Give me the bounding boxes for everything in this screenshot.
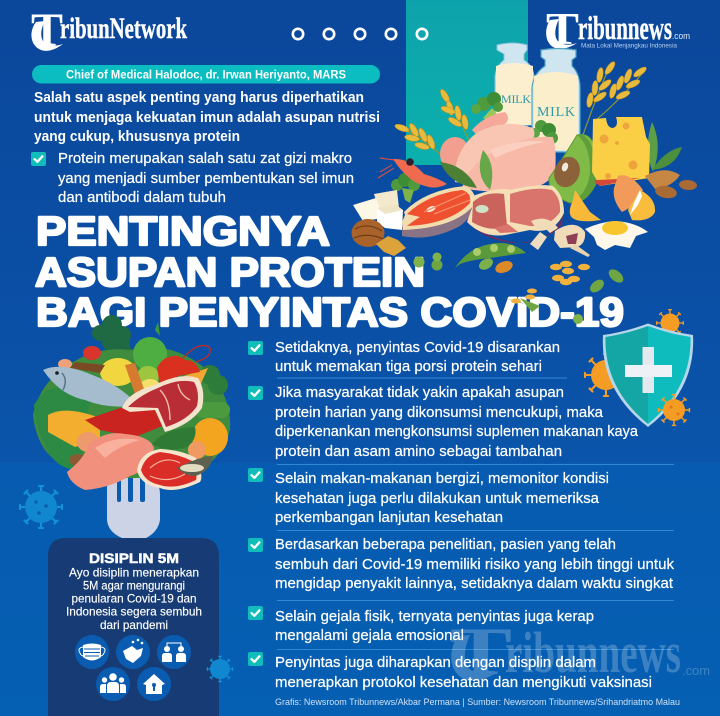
lead paragraph: untuk menjaga kekuatan imun adalah asupan nutrisi (34, 110, 380, 126)
main title: PENTINGNYA (36, 208, 330, 254)
bullet 2 (248, 385, 639, 460)
bullet 2: protein harian yang dikonsumsi mencukupi, maka (275, 405, 604, 421)
salmon slice (137, 449, 201, 490)
bullet 2: Jika masyarakat tidak yakin apakah asupan (275, 385, 564, 401)
icon: orange viruses behind shield (585, 310, 683, 396)
bullet 6: menerapkan protokol kesehatan dan mengikuti vaksinasi (275, 675, 652, 691)
panel: Disiplin 5M (48, 538, 219, 716)
panel text: dari pandemi (100, 618, 168, 632)
checkbox item: protein (31, 151, 354, 206)
logo: TribunNetwork (31, 4, 187, 57)
panel text: Indonesia segera sembuh (66, 604, 202, 618)
chicken breast (67, 433, 154, 490)
panel heading: DISIPLIN 5M (89, 550, 179, 566)
icon: stay home (137, 667, 171, 701)
lead paragraph: Salah satu aspek penting yang harus diperhatikan (34, 90, 364, 106)
credit line: Grafis: Newsroom Tribunnews/Akbar Permana | Sumber: Newsroom Tribunnews/Srihandriatmo Malau (275, 697, 680, 708)
watermark: Tribunnews.com: T (450, 613, 512, 689)
panel text: penularan Covid-19 dan (72, 592, 196, 606)
illustration: protein foods (352, 43, 697, 324)
avocado (152, 427, 196, 449)
bullet 4: Berdasarkan beberapa penelitian, pasien yang telah (275, 537, 616, 553)
milk bottle right: MILK (537, 105, 575, 120)
bullet 5 (248, 606, 594, 644)
red meat (85, 376, 203, 437)
mixed fruits (48, 346, 228, 466)
icon: blue virus small (207, 656, 233, 682)
bullet 4 (248, 537, 675, 592)
chicken (440, 112, 556, 192)
main title: BAGI PENYINTAS COVID-19 (36, 289, 624, 335)
bullet 3 (248, 468, 609, 526)
panel text (66, 566, 202, 632)
checkbox item: protein: Protein merupakan salah satu zat gizi makro (58, 151, 352, 167)
icon: avoid crowds (96, 667, 130, 701)
bullet 4: mengidap penyakit lainnya, setidaknya dalam waktu singkat (275, 576, 673, 592)
logo: Tribunnews.com: Mata Lokal Menjangkau Indonesia (581, 44, 678, 50)
icon: blue virus large (20, 486, 62, 528)
bullet 2: diperkenankan mengkonsumsi suplemen makanan kaya (275, 424, 639, 440)
logo: TribunNetwork: T (31, 4, 63, 57)
shrimp (378, 158, 447, 188)
icon: shield with cross (603, 324, 693, 427)
bullet 3: kesehatan juga perlu dilakukan untuk memeriksa (275, 491, 600, 507)
bullet 3: Selain makan-makanan bergizi, memonitor kondisi (275, 471, 609, 487)
lead paragraph (34, 90, 380, 145)
icon: washing hands (116, 635, 150, 669)
progress dots (293, 29, 427, 39)
eggs (570, 175, 655, 221)
food mass base (33, 347, 230, 478)
mushrooms (530, 219, 590, 257)
panel text: Ayo disiplin menerapkan (69, 566, 199, 580)
watermark: Tribunnews.com: .com (682, 663, 710, 678)
panel text: 5M agar mengurangi (83, 578, 185, 592)
leaves by chicken (440, 150, 492, 190)
broccoli (391, 92, 558, 203)
bullet 1 (248, 340, 560, 375)
logo: Tribunnews.com: .com (672, 31, 690, 42)
almonds (645, 170, 697, 200)
beef cut (467, 185, 564, 243)
milk bottle right (532, 48, 580, 152)
pea pod and peas (414, 243, 626, 324)
bullet 2: protein dan asam amino sebagai tambahan (275, 444, 562, 460)
main title (35, 208, 624, 335)
bullet 3: perkembangan lanjutan kesehatan (275, 510, 503, 526)
wheat stalks (394, 60, 648, 156)
bullet 4: sembuh dari Covid-19 memiliki risiko yang lebih tinggi untuk (275, 557, 675, 573)
oyster (177, 456, 213, 476)
bullet 6: Penyintas juga diharapkan dengan displin dalam (275, 655, 596, 671)
fried egg (585, 221, 648, 250)
fish (43, 367, 138, 407)
salmon steak (402, 186, 475, 238)
bullet 1: untuk memakan tiga porsi protein sehari (275, 359, 542, 375)
main title: ASUPAN PROTEIN (35, 249, 425, 295)
walnut (352, 219, 406, 256)
cheese and leaves (592, 117, 682, 186)
illustration: fork with food (33, 315, 230, 538)
logo: TribunNetwork: ribunNetwork (60, 12, 187, 45)
lentils (511, 261, 590, 304)
source pill (32, 65, 380, 84)
bullet 5: mengalami gejala emosional (275, 628, 464, 644)
fork (107, 478, 160, 538)
icon: mask (75, 635, 109, 669)
bullet 6 (248, 652, 652, 691)
milk bottle left (495, 43, 534, 125)
shrimp (157, 346, 210, 385)
icon: orange virus front (659, 395, 689, 425)
teal header block (406, 0, 528, 165)
tofu cubes (353, 190, 403, 230)
checkbox item: protein: dan antibodi dalam tubuh (58, 190, 226, 206)
greens (34, 337, 230, 470)
source pill: Chief of Medical Halodoc, dr. Irwan Heriyanto, MARS (66, 68, 346, 82)
watermark: Tribunnews.com (450, 613, 710, 689)
avocado (549, 134, 596, 203)
bullet 1: Setidaknya, penyintas Covid-19 disarankan (275, 340, 560, 356)
parsley (92, 315, 160, 368)
checkbox item: protein: yang menjadi sumber pembentukan sel imun (58, 171, 354, 187)
icon: keep distance (157, 635, 191, 669)
logo: Tribunnews.com (546, 3, 690, 54)
bullet 5: Selain gejala fisik, ternyata penyintas juga kerap (275, 609, 594, 625)
milk bottle left: MILK (501, 92, 531, 106)
lead paragraph: yang cukup, khususnya protein (34, 129, 240, 145)
logo: Tribunnews.com: T (546, 3, 579, 54)
